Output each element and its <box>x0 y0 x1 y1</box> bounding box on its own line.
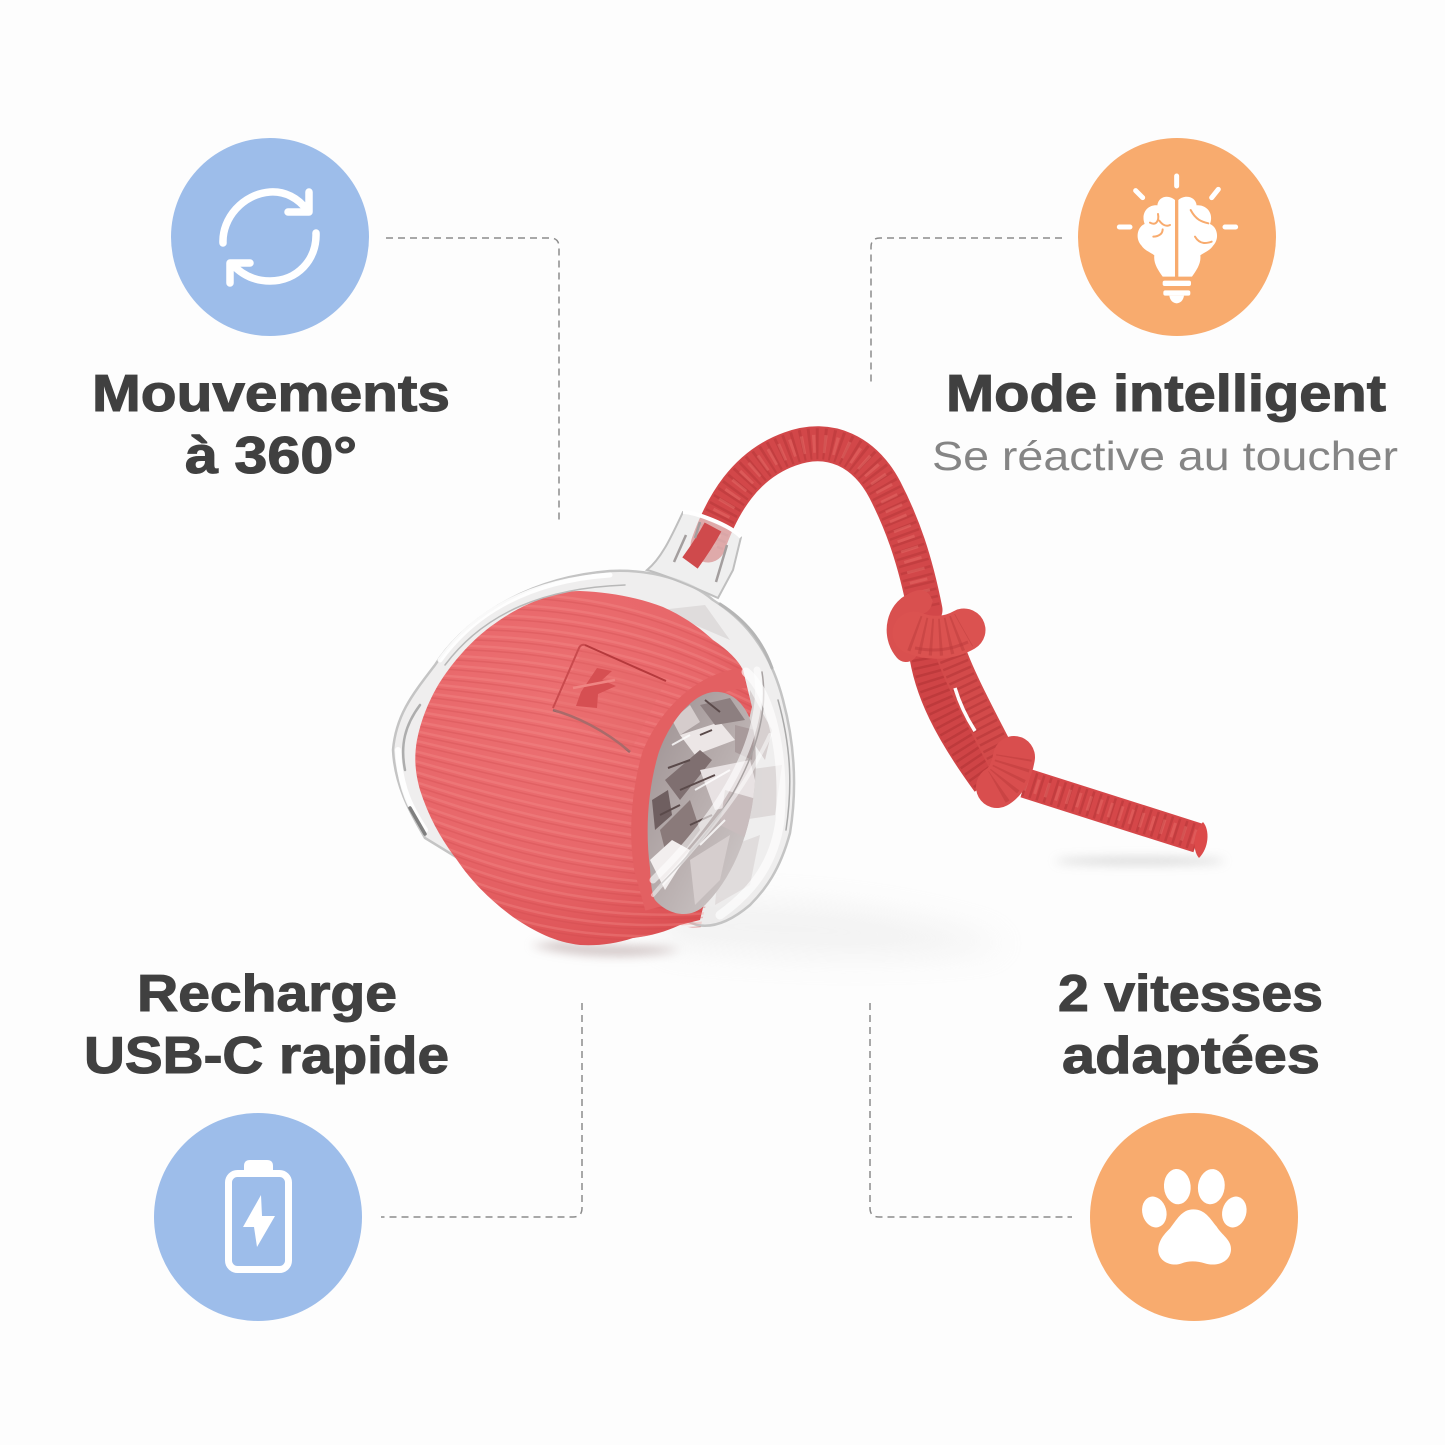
heading: Mouvements à 360° <box>92 365 450 485</box>
rope: two strands between knots <box>925 650 1005 782</box>
heading: 2 vitesses adaptées: adaptées <box>1062 1027 1320 1085</box>
smooth rim around window <box>641 678 745 908</box>
icon: battery in blue circle <box>154 1113 362 1321</box>
heading: Recharge USB-C rapide: Recharge <box>137 965 397 1023</box>
heading: Recharge USB-C rapide <box>84 965 449 1085</box>
rope: first knot <box>899 602 968 650</box>
dashed connector: bottom right <box>870 1003 1072 1217</box>
transparent neck <box>647 512 741 598</box>
window with internal mechanism <box>648 692 760 914</box>
rope: tail <box>1025 783 1208 858</box>
heading: Mode intelligent with subtitle: Mode intelligent <box>946 365 1386 423</box>
ground shadows <box>530 858 1225 957</box>
rope: second knot <box>997 757 1014 787</box>
red ribbed ball <box>415 591 752 946</box>
heading: Recharge USB-C rapide: USB-C rapide <box>84 1027 449 1085</box>
dashed connector: top left <box>386 238 559 520</box>
internal reflections visible through shell <box>660 605 782 905</box>
icon: rotation arrows in blue circle <box>171 138 369 336</box>
dashed connector: bottom left <box>381 1003 582 1217</box>
icon: brain light bulb in orange circle <box>1078 138 1276 336</box>
door panel with emblem <box>553 645 666 752</box>
product: ball toy with rope <box>335 444 1225 973</box>
shell highlights <box>398 575 790 915</box>
heading: Mode intelligent with subtitle: Se réactive au toucher <box>932 433 1398 479</box>
heading: Mouvements à 360°: à 360° <box>185 427 357 485</box>
dashed connector: top right <box>871 238 1062 385</box>
heading: 2 vitesses adaptées: 2 vitesses <box>1058 965 1323 1023</box>
transparent shell <box>393 571 794 926</box>
heading: Mouvements à 360°: Mouvements <box>92 365 450 423</box>
heading: 2 vitesses adaptées <box>1058 965 1323 1085</box>
heading: Mode intelligent with subtitle <box>932 365 1398 479</box>
rope: upper arc <box>708 444 925 610</box>
rope <box>708 444 1208 858</box>
icon: paw in orange circle <box>1090 1113 1298 1321</box>
